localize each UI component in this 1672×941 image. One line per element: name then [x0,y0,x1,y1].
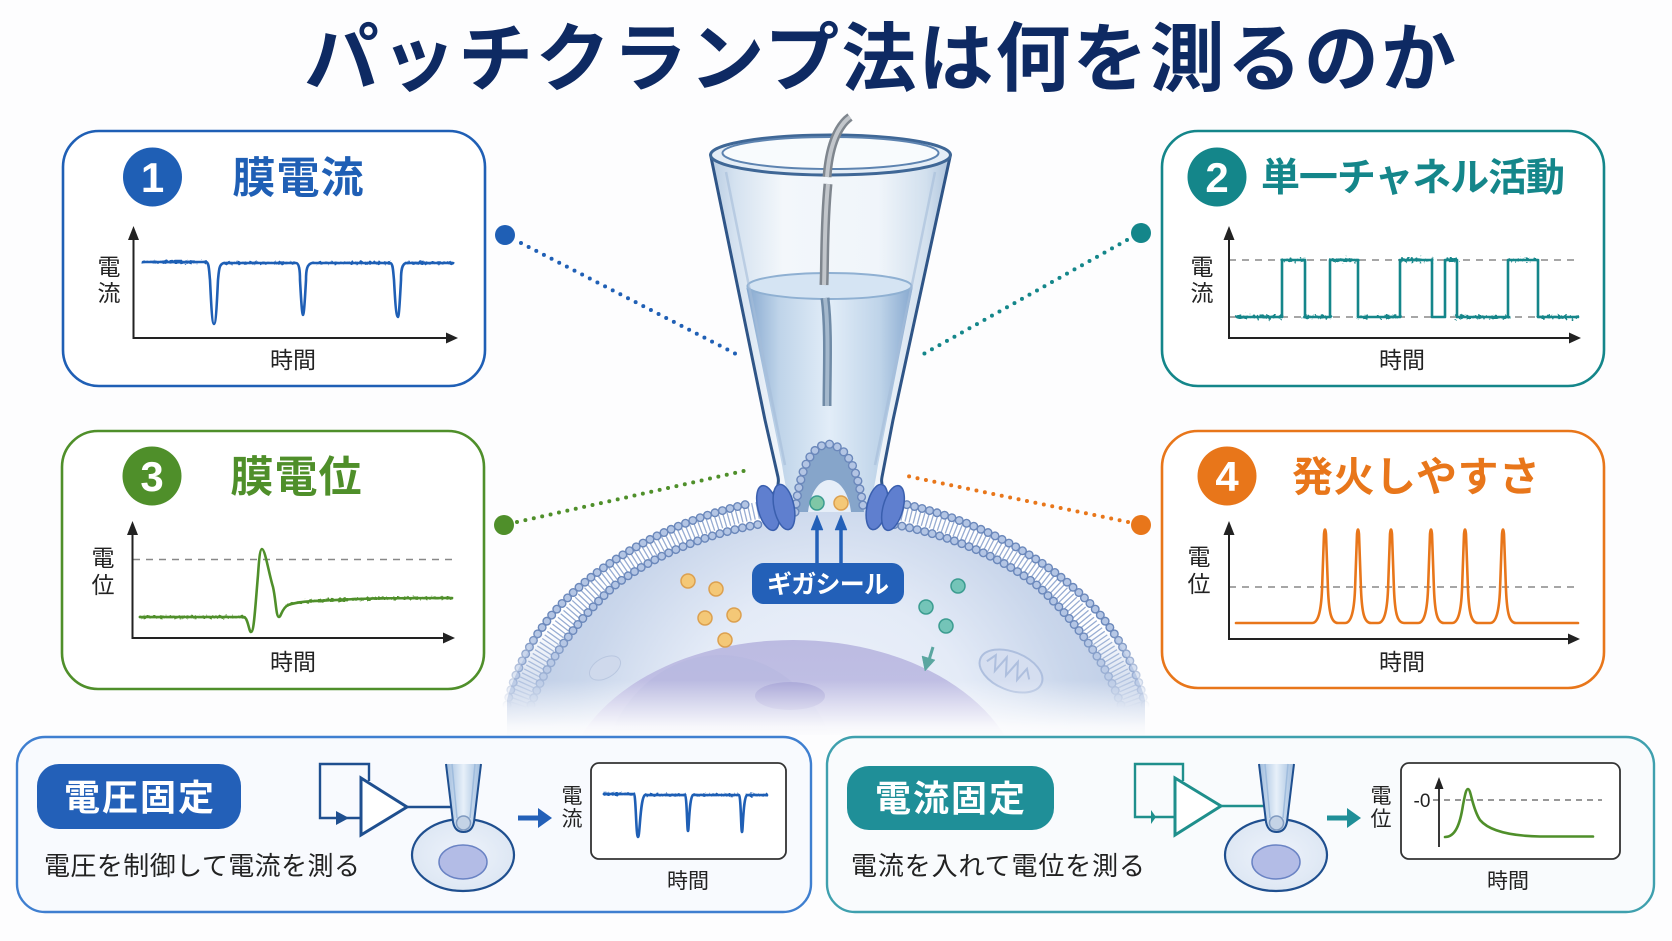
pipette liquid [746,286,913,505]
arrow [1327,808,1361,828]
badge 3 [122,446,182,506]
y label: 流 [1190,280,1214,306]
cell [1225,819,1327,891]
badge 3: 3 [140,453,164,500]
zero level line [1433,799,1602,801]
heading: 膜電位 [230,454,362,502]
panel 2: single channel activity [1162,131,1604,386]
label: giga seal [752,563,904,604]
description: 電流を入れて電位を測る [851,851,1145,881]
x label: 時間 [1379,347,1425,373]
mitochondrion right [973,641,1049,701]
trace [143,262,453,324]
pipette walls [711,157,950,495]
axes [1224,226,1581,344]
panel 3: membrane potential [62,431,484,689]
y label: 位 [1370,808,1392,831]
arrows to ions [811,515,847,565]
x label: 時間 [1487,870,1529,893]
pill heading [847,766,1054,830]
connector 1 [495,225,738,355]
inner glass lines [726,172,935,465]
y label: 流 [98,280,120,306]
seal proteins right [862,482,909,533]
cell [412,819,514,891]
central illustration: cell and pipette [470,117,1190,941]
connector 3 [494,470,748,535]
threshold line [133,558,452,560]
y label: 電 [1190,254,1214,280]
title: パッチクランプ法は何を測るのか [304,17,1456,101]
axes [127,521,455,644]
mini chart frame [1401,763,1620,859]
mini axis [1434,777,1444,847]
pipette [446,764,481,832]
trace [1237,260,1578,317]
panel 1: membrane current [63,131,485,386]
mini chart frame [591,763,786,859]
y label: 電 [562,785,582,808]
badge 1: 1 [141,154,164,201]
small teal arrow [922,647,935,671]
threshold line [1229,586,1580,588]
panel 4: excitability [1162,431,1604,688]
mitochondrion left [585,651,625,685]
pill heading: 電圧固定 [64,777,214,818]
x label: 時間 [1379,649,1425,675]
y label [1190,254,1214,306]
label: giga seal: ギガシール [767,571,889,599]
seal proteins left [752,482,799,533]
y label [1370,785,1392,831]
amplifier circuit [320,764,452,835]
membrane right [891,503,1145,705]
axes [128,226,458,344]
badge 1 [123,148,182,206]
x label: 時間 [270,649,316,675]
membrane dome in pipette tip [795,444,864,512]
pill heading: 電流固定 [875,778,1025,819]
liquid surface [748,273,912,299]
heading: 発火しやすさ [1292,454,1540,500]
y label [92,545,114,598]
y label [562,785,582,831]
y label [1188,544,1210,597]
y label: 電 [98,254,120,280]
orange ions in cell [681,574,741,647]
pill heading [37,764,241,829]
y label: 電 [92,545,114,571]
pipette [1259,764,1294,832]
heading: 膜電流 [232,155,364,203]
amplifier circuit [1135,764,1265,835]
dashed levels [1229,260,1580,317]
connector 4 [907,476,1151,535]
teal ions in cell [919,579,965,633]
cell interior [507,504,1145,735]
y label: 流 [562,808,582,831]
axes [1224,521,1580,644]
electrode wire [824,117,850,406]
y label: 位 [92,572,114,598]
nucleus [597,640,993,724]
arrow [518,808,552,828]
membrane left [507,503,761,705]
description: 電圧を制御して電流を測る [44,851,360,881]
zero label: -0 [1414,791,1430,812]
y label: 位 [1188,571,1210,597]
x label: 時間 [270,347,316,373]
fade out at bottom of cell [470,680,1190,738]
connector 2 [920,223,1151,356]
ions at the patch [810,496,848,510]
mini trace [1445,789,1593,837]
bottom panel: current clamp [827,737,1654,912]
y label: 電 [1370,785,1392,808]
badge 4: 4 [1215,453,1239,500]
trace [1236,530,1578,623]
pipette rim [710,135,950,175]
x label: 時間 [667,870,709,893]
heading: 単一チャネル活動 [1261,157,1565,200]
y label: 電 [1188,544,1210,570]
mini trace [604,794,767,837]
pipette glass body [711,157,950,505]
trace [140,549,452,632]
y label [98,254,120,306]
bottom panel: voltage clamp [17,737,811,912]
badge 2: 2 [1205,154,1229,201]
badge 4 [1198,446,1256,506]
badge 2 [1188,148,1246,206]
